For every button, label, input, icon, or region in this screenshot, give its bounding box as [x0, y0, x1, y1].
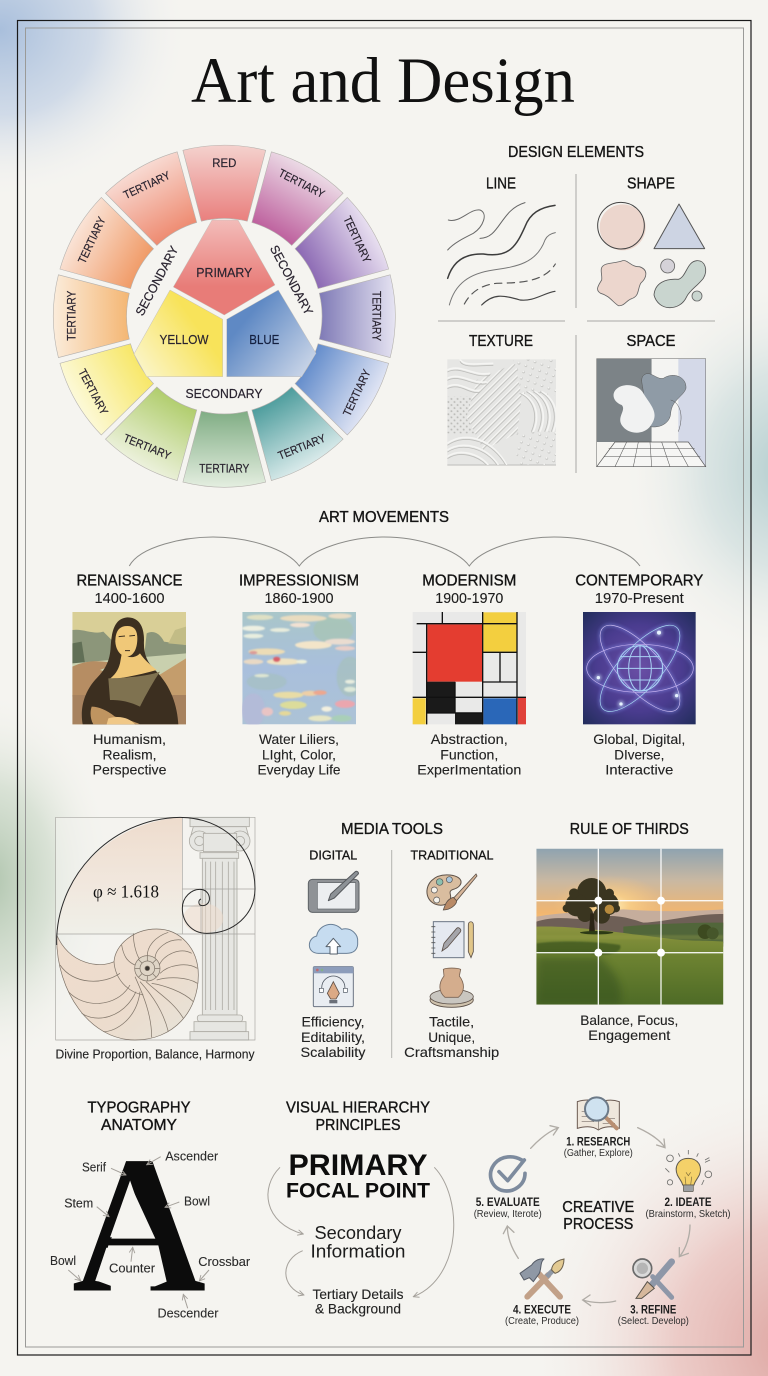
subheading: traditional: TRADITIONAL — [410, 847, 494, 862]
heading: rule of thirds: RULE OF THIRDS — [570, 821, 689, 838]
tertiary text — [312, 1286, 404, 1317]
wheel labels: BLUE — [249, 332, 280, 347]
panel: creative process — [474, 1097, 730, 1327]
heading: creative process: PROCESS — [563, 1216, 633, 1233]
rule of thirds caption — [580, 1012, 678, 1043]
digital benefits — [300, 1014, 366, 1060]
icon: light bulb with ideas — [665, 1150, 712, 1192]
modernism keywords: Function, — [440, 747, 498, 763]
anatomy labels: Bowl — [184, 1193, 210, 1208]
icon: painter palette — [427, 874, 477, 910]
renaissance keywords — [92, 731, 167, 777]
shape samples — [598, 202, 706, 308]
digital benefits: Scalability — [300, 1044, 366, 1060]
wheel labels: TERTIARY — [67, 290, 79, 341]
heading: visual hierarchy — [286, 1100, 430, 1134]
renaissance heading: RENAISSANCE — [76, 573, 182, 590]
column: renaissance — [72, 573, 186, 777]
heading: art movements: ART MOVEMENTS — [319, 509, 449, 526]
wheel labels: SECONDARY — [186, 387, 263, 401]
hierarchy arrows — [268, 1167, 454, 1297]
wheel labels: TERTIARY — [121, 433, 173, 463]
wheel labels: TERTIARY — [199, 464, 250, 476]
primary triangle wedges — [134, 220, 316, 377]
icon: cloud upload — [309, 924, 358, 954]
step labels: 1. RESEARCH — [566, 1137, 630, 1149]
secondary text: Secondary — [314, 1223, 402, 1243]
traditional benefits: Craftsmanship — [404, 1044, 499, 1060]
step labels: (Create, Produce) — [505, 1316, 579, 1327]
rule of thirds caption: Engagement — [588, 1027, 670, 1043]
impressionism keywords — [258, 731, 341, 777]
wheel labels: YELLOW — [160, 332, 209, 347]
anatomy letter A: A — [72, 1116, 206, 1334]
anatomy arrows — [68, 1157, 209, 1308]
digital benefits: Efficiency, — [302, 1014, 364, 1030]
impressionism dates: 1860-1900 — [264, 590, 334, 607]
step labels: (Select. Develop) — [618, 1316, 689, 1327]
tertiary text: Tertiary Details — [312, 1286, 404, 1302]
heading: texture: TEXTURE — [469, 333, 533, 350]
golden ratio diagram — [56, 817, 255, 1040]
contemporary dates: 1970-Present — [595, 590, 685, 607]
modernism keywords: Abstraction, — [431, 731, 508, 747]
anatomy labels: Bowl — [50, 1253, 76, 1268]
landscape photo with thirds grid — [536, 849, 723, 1005]
icon: hammer and brush — [520, 1259, 564, 1297]
icon: sketchbook and pencil — [431, 922, 473, 958]
impressionism heading: IMPRESSIONISM — [239, 573, 359, 590]
wheel labels: PRIMARY — [196, 265, 253, 280]
heading: design elements: DESIGN ELEMENTS — [508, 144, 644, 161]
image: portrait painting — [72, 612, 186, 725]
heading: creative process: CREATIVE — [562, 1199, 634, 1216]
step labels — [474, 1137, 730, 1327]
step labels: (Gather, Explore) — [564, 1148, 633, 1159]
image: neon globe with orbits — [583, 612, 696, 724]
wheel labels: TERTIARY — [277, 433, 328, 463]
heading: visual hierarchy: VISUAL HIERARCHY — [286, 1100, 430, 1117]
step labels: 3. REFINE — [630, 1305, 677, 1317]
panel: typography anatomy — [50, 1100, 251, 1334]
column: modernism — [413, 573, 526, 777]
wheel labels: TERTIARY — [75, 367, 110, 417]
subheading: digital: DIGITAL — [309, 847, 357, 862]
icon: evaluate check mark — [491, 1157, 525, 1191]
wheel labels: SECONDARY — [267, 243, 316, 318]
contemporary keywords: Interactive — [605, 761, 674, 777]
renaissance keywords: Realism, — [102, 747, 156, 763]
step labels: (Review, Iterote) — [474, 1209, 542, 1220]
secondary text — [310, 1223, 406, 1262]
primary focal text: PRIMARY — [288, 1149, 428, 1182]
caption: Divine Proportion, Balance, Harmony — [56, 1046, 255, 1062]
image: geometric abstract painting — [413, 612, 526, 724]
golden spiral fill — [57, 817, 182, 935]
panel: visual hierarchy — [268, 1100, 454, 1317]
construction grid — [56, 817, 255, 1040]
ionic column — [189, 817, 250, 1040]
title: Art and Design — [191, 45, 575, 117]
heading: typography anatomy: ANATOMY — [101, 1117, 177, 1134]
wheel labels: TERTIARY — [370, 291, 382, 341]
renaissance keywords: Perspective — [92, 761, 167, 777]
traditional icons — [427, 874, 477, 1007]
panel: art movements — [72, 509, 704, 777]
anatomy labels: Ascender — [165, 1149, 219, 1164]
wheel labels: SECONDARY — [133, 243, 182, 318]
anatomy labels: Counter — [109, 1261, 156, 1276]
heading: line: LINE — [486, 176, 516, 192]
heading: typography anatomy — [88, 1100, 191, 1134]
traditional benefits: Tactile, — [429, 1014, 474, 1030]
step labels: 4. EXECUTE — [513, 1305, 571, 1317]
anatomy labels: Descender — [158, 1306, 219, 1321]
quadrant dividers — [438, 174, 715, 473]
panel: colour wheel — [53, 145, 395, 487]
impressionism keywords: LIght, Color, — [262, 747, 336, 763]
contemporary heading: CONTEMPORARY — [575, 573, 704, 590]
icon: book and magnifier — [577, 1097, 619, 1130]
wheel labels — [67, 158, 382, 476]
wheel labels: TERTIARY — [276, 167, 327, 201]
anatomy labels — [50, 1149, 251, 1321]
digital benefits: Editability, — [301, 1029, 365, 1045]
wheel labels: TERTIARY — [340, 215, 373, 265]
modernism dates: 1900-1970 — [435, 590, 503, 607]
contemporary keywords: Global, Digital, — [593, 731, 685, 747]
golden spiral — [57, 817, 255, 945]
wheel labels: RED — [212, 158, 236, 170]
heading: visual hierarchy: PRINCIPLES — [316, 1117, 400, 1134]
step labels: 2. IDEATE — [664, 1197, 712, 1209]
heading: typography anatomy: TYPOGRAPHY — [88, 1100, 191, 1117]
modernism keywords — [417, 731, 521, 777]
icon: clay pot on wheel — [430, 968, 473, 1007]
secondary text: Information — [310, 1242, 406, 1262]
heading: creative process — [562, 1199, 634, 1233]
line samples — [448, 203, 555, 305]
icon: refine tools — [633, 1259, 672, 1298]
panel: golden ratio — [56, 817, 255, 1062]
column: impressionism — [239, 573, 363, 777]
texture sample — [447, 359, 556, 467]
heading: shape: SHAPE — [627, 176, 675, 192]
letter counter openings — [99, 1187, 167, 1286]
nautilus shell — [57, 929, 198, 1040]
impressionism keywords: Water Liliers, — [259, 731, 339, 747]
process arrows — [503, 1126, 690, 1306]
rule of thirds caption: Balance, Focus, — [580, 1012, 678, 1028]
space sample — [597, 359, 706, 467]
heading: space: SPACE — [626, 333, 676, 350]
renaissance keywords: Humanism, — [93, 731, 166, 747]
wheel labels: TERTIARY — [122, 170, 173, 202]
wheel labels: TERTIARY — [77, 215, 109, 266]
panel: rule of thirds — [536, 821, 723, 1043]
image: water lilies painting — [242, 612, 363, 727]
anatomy labels: Crossbar — [198, 1254, 251, 1269]
heading: media tools: MEDIA TOOLS — [341, 821, 443, 838]
panel: design elements — [438, 144, 715, 473]
wheel labels: TERTIARY — [342, 368, 374, 418]
contemporary keywords — [593, 731, 685, 777]
primary focal text: FOCAL POINT — [286, 1179, 430, 1202]
tertiary and primary ring segments — [53, 145, 395, 487]
impressionism keywords: Everyday Life — [258, 761, 341, 777]
icon: drawing tablet — [308, 871, 359, 912]
timeline arcs — [129, 537, 640, 566]
anatomy labels: Stem — [64, 1196, 93, 1211]
step labels: 5. EVALUATE — [476, 1197, 540, 1209]
modernism keywords: ExperImentation — [417, 761, 521, 777]
renaissance dates: 1400-1600 — [94, 590, 164, 607]
contemporary keywords: DIverse, — [614, 747, 664, 763]
tertiary text: & Background — [315, 1301, 401, 1317]
media divider — [391, 850, 393, 1058]
modernism heading: MODERNISM — [422, 573, 516, 590]
primary focal text — [286, 1149, 430, 1202]
icon: vector pen window — [313, 967, 353, 1007]
anatomy labels: Serif — [82, 1160, 106, 1175]
digital icons — [308, 871, 359, 1007]
step labels: (Brainstorm, Sketch) — [646, 1209, 730, 1220]
phi value: φ ≈ 1.618 — [93, 882, 159, 902]
panel: media tools — [300, 821, 499, 1060]
traditional benefits — [404, 1014, 499, 1060]
traditional benefits: Unique, — [428, 1029, 475, 1045]
column: contemporary — [575, 573, 704, 777]
